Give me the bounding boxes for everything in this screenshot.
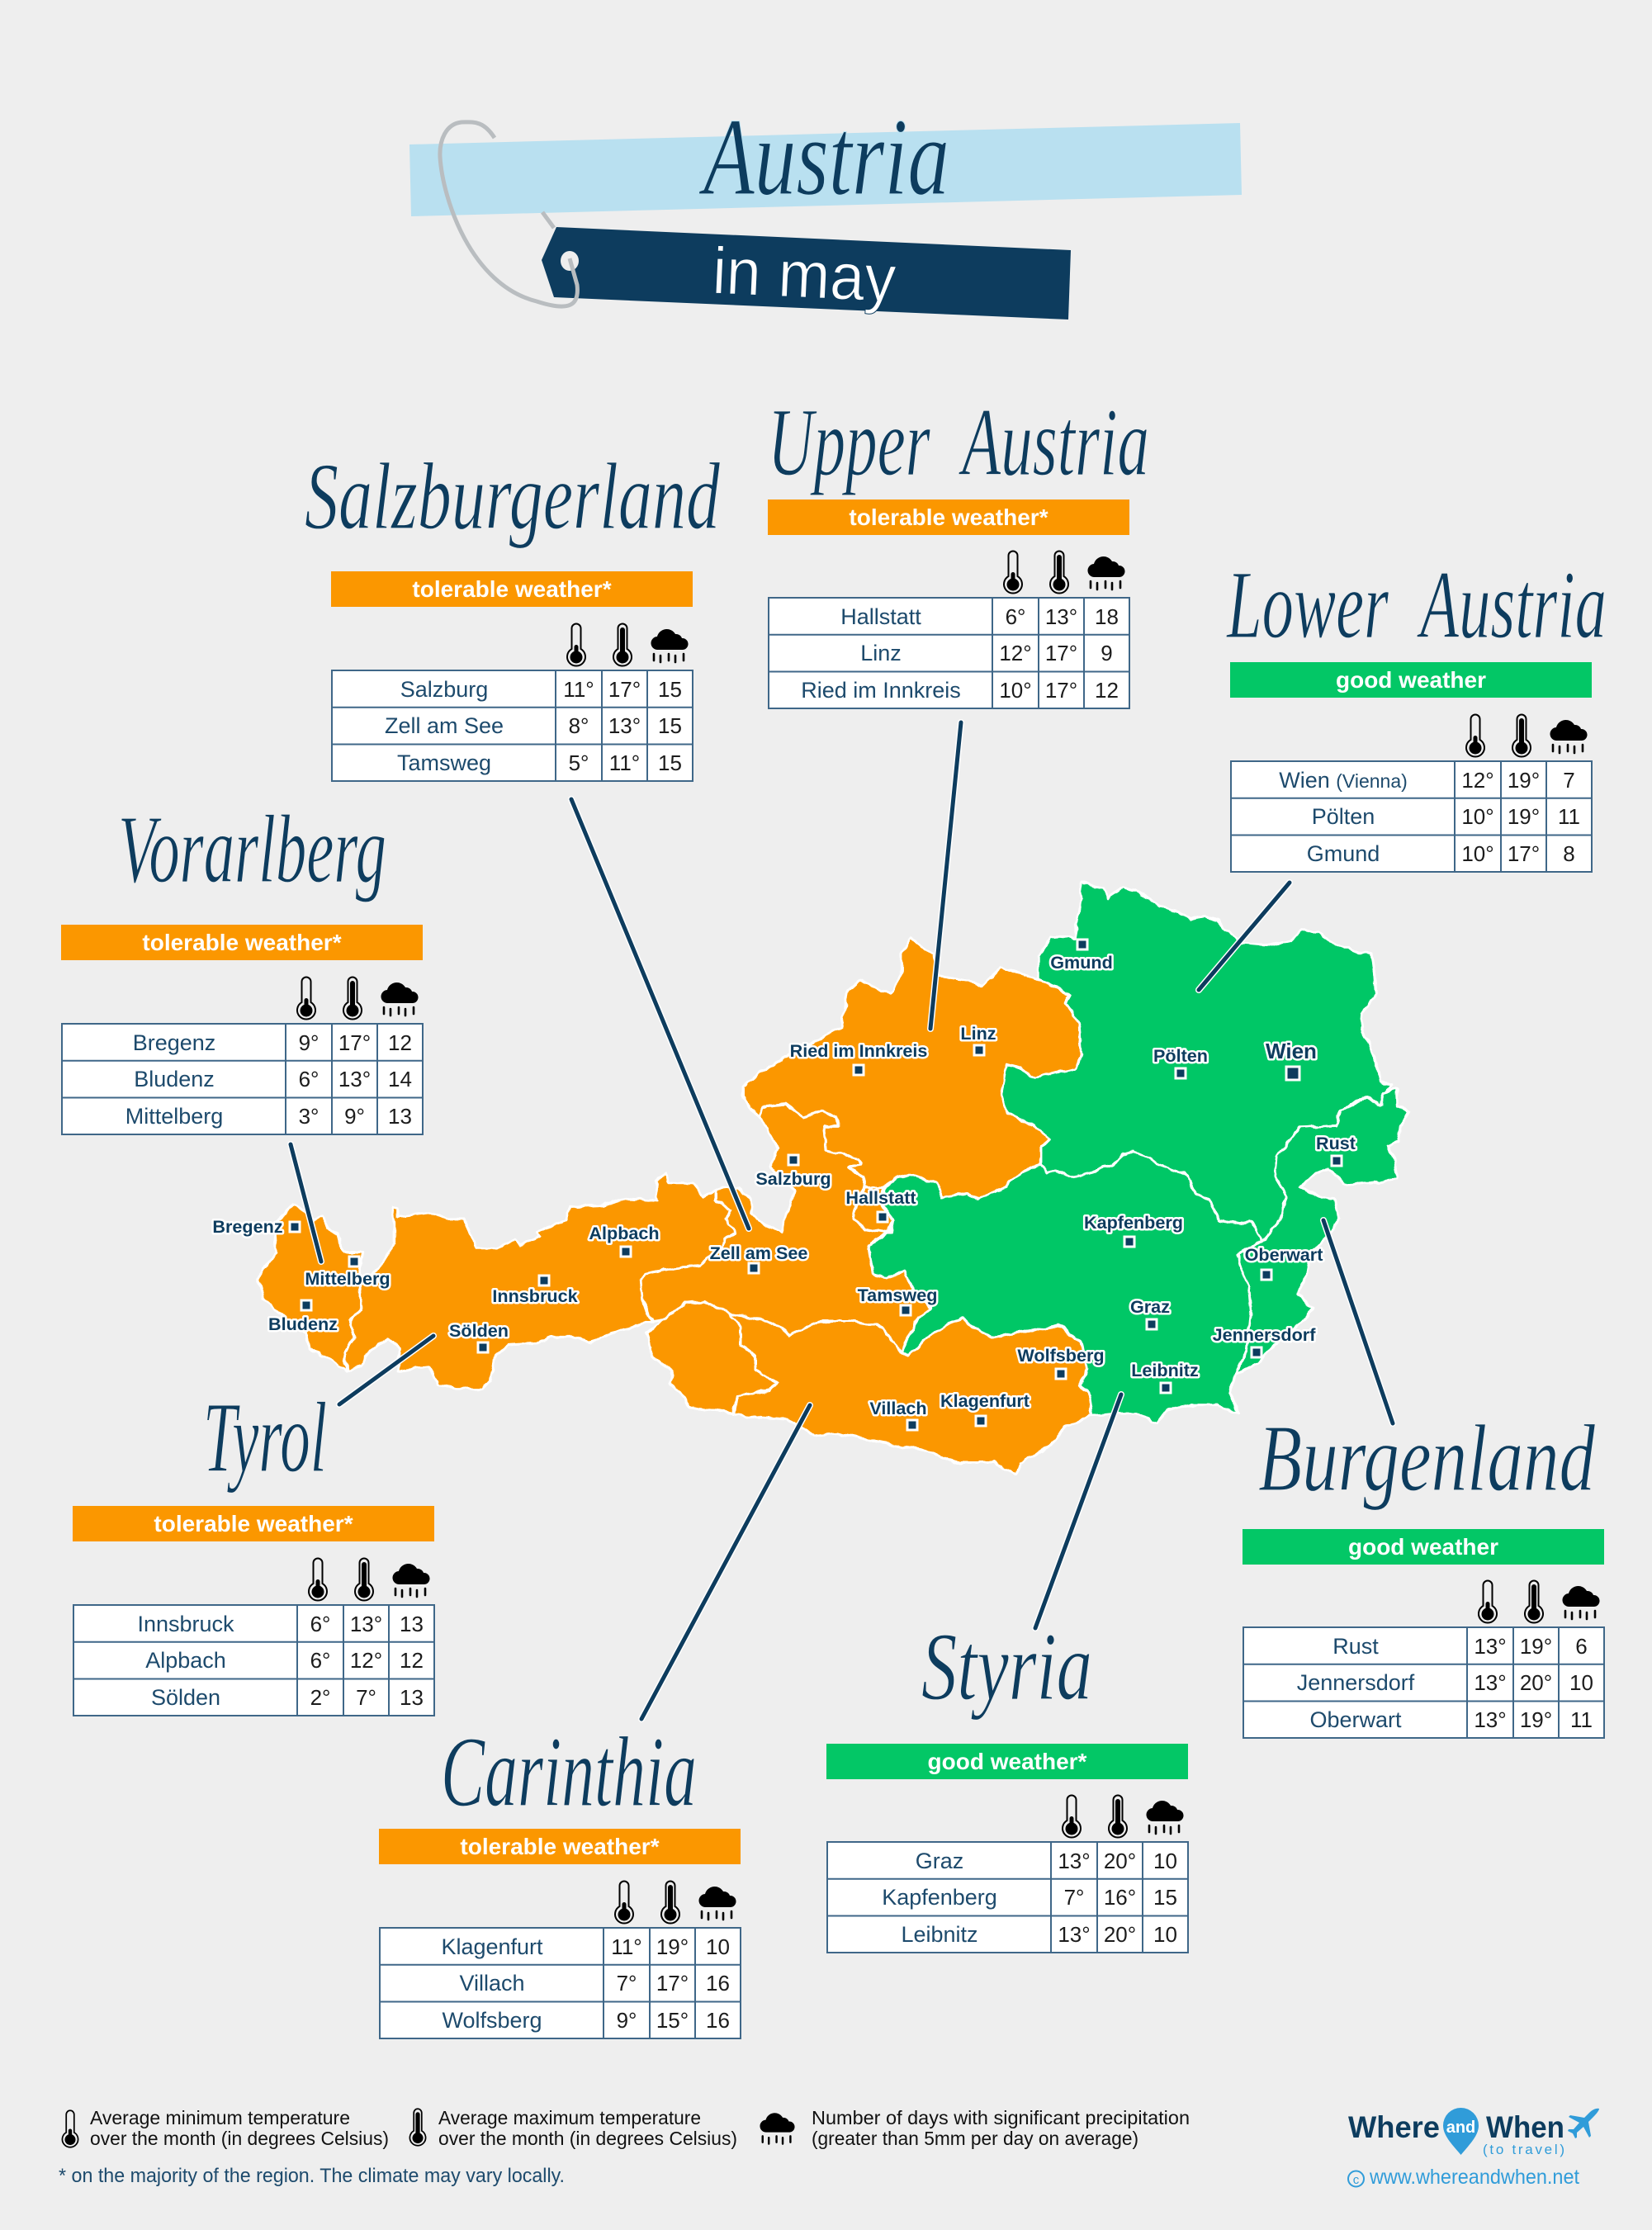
climate table: 17° — [1508, 841, 1540, 866]
climate table: 7° — [356, 1685, 376, 1710]
climate table: Kapfenberg — [882, 1885, 997, 1910]
subtitle: in may: in may — [711, 234, 897, 315]
city: Bludenz — [268, 1300, 338, 1334]
climate table: Salzburg — [400, 677, 488, 702]
region: Tyrol — [344, 1173, 736, 1389]
climate table: 10 — [706, 1934, 730, 1959]
climate table: Wien (Vienna) — [1279, 768, 1408, 793]
panel: Tyrol — [73, 1506, 434, 1716]
climate table: 11 — [1558, 804, 1580, 829]
climate table — [62, 1024, 423, 1134]
climate table: Zell am See — [385, 713, 504, 738]
status banner: good weather — [1348, 1534, 1498, 1560]
legend: precipitation: (greater than 5mm per day on average) — [812, 2128, 1138, 2149]
climate table — [73, 1605, 434, 1716]
climate table — [1243, 1627, 1604, 1738]
climate table: 13 — [400, 1612, 424, 1636]
status banner: tolerable weather* — [849, 504, 1048, 530]
panel: Lower Austria — [1230, 662, 1592, 872]
city: Leibnitz: Leibnitz — [1131, 1360, 1199, 1380]
city: Mittelberg: Mittelberg — [305, 1268, 391, 1289]
region: Burgenland — [1235, 1089, 1410, 1374]
climate table: 2° — [310, 1685, 330, 1710]
climate table: 7° — [1064, 1885, 1084, 1910]
region: Upper Austria — [743, 939, 1081, 1200]
climate table — [827, 1842, 1188, 1953]
panel: Vorarlberg — [61, 925, 423, 1134]
heading: Tyrol: Tyrol — [203, 1382, 327, 1494]
region: Vorarlberg — [258, 1205, 363, 1371]
line: Vorarlberg — [291, 1144, 321, 1262]
panel: Styria — [826, 1744, 1188, 1953]
climate table: Sölden — [151, 1685, 220, 1710]
legend: minimum temperature — [62, 2107, 389, 2149]
city: Kapfenberg — [1084, 1212, 1183, 1247]
climate table: Linz — [860, 641, 902, 665]
city: Kapfenberg: Kapfenberg — [1084, 1212, 1183, 1233]
status banner — [1243, 1529, 1604, 1565]
region: Hallstatt pocket — [854, 1187, 893, 1233]
climate table: Bregenz — [133, 1030, 215, 1055]
climate table: 16 — [706, 2008, 730, 2033]
climate table: 12 — [1095, 678, 1119, 703]
city: Wien: Wien — [1266, 1039, 1317, 1063]
city: Zell am See — [710, 1243, 807, 1273]
climate table: 17° — [1045, 678, 1077, 703]
city: Linz: Linz — [960, 1023, 996, 1044]
city: Graz — [1130, 1296, 1170, 1329]
city: Graz: Graz — [1130, 1296, 1170, 1317]
climate table: 18 — [1095, 604, 1119, 629]
climate table: 20° — [1520, 1670, 1552, 1695]
climate table: 15 — [658, 750, 682, 775]
status banner — [768, 500, 1129, 535]
climate table: Gmund — [1307, 841, 1380, 866]
climate table: Klagenfurt — [441, 1934, 543, 1959]
status banner: good weather* — [928, 1749, 1087, 1774]
city: Gmund — [1050, 940, 1113, 973]
climate table: 17° — [338, 1030, 371, 1055]
climate table: 5° — [569, 750, 589, 775]
climate table: 13° — [1474, 1707, 1507, 1732]
panel: Burgenland — [1243, 1529, 1604, 1738]
city: Alpbach — [589, 1223, 660, 1257]
climate table: Pölten — [1312, 804, 1375, 829]
city: Hallstatt: Hallstatt — [845, 1187, 916, 1208]
climate table: 12° — [350, 1648, 382, 1673]
climate table: Bludenz — [134, 1067, 215, 1091]
title band — [409, 123, 1242, 216]
logo: Where: Where — [1348, 2110, 1440, 2144]
climate table: 9° — [617, 2008, 637, 2033]
climate table: Graz — [916, 1849, 963, 1873]
weather icons — [1004, 552, 1125, 594]
luggage tag — [542, 227, 1071, 320]
weather icons — [615, 1881, 736, 1924]
climate table — [380, 1928, 741, 2038]
climate table: 20° — [1104, 1849, 1136, 1873]
city: Innsbruck — [492, 1276, 579, 1306]
city: Jennersdorf: Jennersdorf — [1213, 1324, 1316, 1345]
climate table: 19° — [1508, 768, 1540, 793]
region: Lower Austria — [1001, 881, 1392, 1241]
panel: Salzburgerland — [331, 571, 693, 781]
city: Tamsweg — [858, 1285, 937, 1315]
climate table: 17° — [608, 677, 641, 702]
city: Hallstatt — [845, 1187, 916, 1222]
climate table: 10° — [1461, 841, 1494, 866]
climate table: 19° — [1520, 1634, 1552, 1659]
weather icons — [1466, 715, 1588, 757]
city labels and markers — [212, 940, 1356, 1430]
line: Upper Austria — [930, 722, 961, 1029]
footnote: * on the majority of the region. The climate may vary locally. — [59, 2165, 565, 2187]
city: Innsbruck: Innsbruck — [492, 1285, 579, 1306]
heading: Styria: Styria — [921, 1612, 1092, 1721]
climate table: 14 — [388, 1067, 412, 1091]
climate table: 6° — [1006, 604, 1025, 629]
climate table: 12° — [999, 641, 1032, 665]
weather icons — [1479, 1580, 1600, 1623]
climate table: 19° — [1508, 804, 1540, 829]
logo: plane icon — [1568, 2109, 1599, 2138]
heading: Salzburgerland: Salzburgerland — [305, 444, 720, 549]
climate table: 15 — [658, 713, 682, 738]
status banner: tolerable weather* — [154, 1511, 353, 1536]
city: Salzburg: Salzburg — [755, 1168, 831, 1189]
status banner — [331, 571, 693, 607]
legend: maximum temperature: Average maximum temperature — [438, 2107, 701, 2128]
city: Zell am See: Zell am See — [710, 1243, 807, 1263]
city: Alpbach: Alpbach — [589, 1223, 660, 1243]
line: Lower Austria — [1199, 883, 1290, 990]
heading: Vorarlberg: Vorarlberg — [118, 795, 386, 903]
legend: precipitation: Number of days with significant precipitation — [812, 2107, 1190, 2128]
city: Linz — [960, 1023, 996, 1055]
title group — [409, 96, 1242, 320]
city: Klagenfurt — [940, 1390, 1030, 1426]
climate table: 10 — [1153, 1922, 1177, 1947]
climate table: 11° — [609, 750, 640, 775]
status banner: tolerable weather* — [412, 576, 612, 602]
climate table: 12° — [1461, 768, 1494, 793]
city: Bludenz: Bludenz — [268, 1314, 338, 1334]
climate table: 13° — [1474, 1634, 1507, 1659]
map of Austria — [258, 881, 1410, 1475]
climate table: 15 — [658, 677, 682, 702]
climate table: 6 — [1575, 1634, 1588, 1659]
panel: Upper Austria — [768, 500, 1129, 708]
panel: Carinthia — [379, 1829, 741, 2038]
climate table — [1231, 761, 1592, 872]
city: Oberwart — [1245, 1244, 1323, 1280]
city: Rust: Rust — [1316, 1133, 1356, 1153]
region: East Tyrol — [646, 1301, 776, 1414]
climate table: Villach — [459, 1971, 525, 1996]
climate table: 9° — [299, 1030, 319, 1055]
climate table: 10° — [1461, 804, 1494, 829]
heading: Carinthia: Carinthia — [441, 1716, 697, 1828]
legend: precipitation — [760, 2107, 1190, 2149]
city: Salzburg — [755, 1155, 831, 1189]
legend: minimum temperature: over the month (in degrees Celsius) — [90, 2128, 389, 2149]
city: Leibnitz — [1131, 1360, 1199, 1393]
tag hole — [561, 251, 579, 271]
logo: pin with and: and — [1446, 2119, 1475, 2137]
climate table: Innsbruck — [137, 1612, 234, 1636]
city: Sölden: Sölden — [449, 1320, 509, 1341]
line: Carinthia — [641, 1405, 810, 1719]
climate table: 16° — [1104, 1885, 1136, 1910]
climate table: Alpbach — [145, 1648, 226, 1673]
city: Klagenfurt: Klagenfurt — [940, 1390, 1030, 1411]
climate table: 13° — [1474, 1670, 1507, 1695]
logo: copyright icon — [1348, 2171, 1364, 2187]
legend — [59, 2107, 1190, 2187]
legend: minimum temperature: Average minimum temperature — [90, 2107, 350, 2128]
climate table: 13° — [1045, 604, 1077, 629]
climate table: 13° — [1058, 1849, 1091, 1873]
climate table: Leibnitz — [901, 1922, 978, 1947]
climate table: 19° — [656, 1934, 689, 1959]
city: Tamsweg: Tamsweg — [858, 1285, 937, 1305]
climate table: 9° — [344, 1104, 365, 1129]
city: Wolfsberg: Wolfsberg — [1017, 1345, 1105, 1366]
status banner — [1230, 662, 1592, 698]
logo: website: www.whereandwhen.net — [1369, 2166, 1579, 2189]
climate table: 8 — [1563, 841, 1575, 866]
climate table: 10 — [1569, 1670, 1593, 1695]
climate table: 6° — [310, 1648, 330, 1673]
climate table: 3° — [299, 1104, 319, 1129]
climate table: 11 — [1570, 1707, 1593, 1732]
climate table: Ried im Innkreis — [801, 678, 961, 703]
climate table: 9 — [1101, 641, 1113, 665]
line: Burgenland — [1323, 1220, 1393, 1423]
legend: maximum temperature — [409, 2107, 737, 2149]
status banner — [379, 1829, 741, 1864]
city: Wolfsberg — [1017, 1345, 1105, 1379]
climate table: 13 — [400, 1685, 424, 1710]
city: Ried im Innkreis: Ried im Innkreis — [790, 1040, 927, 1061]
logo: pin with and — [1443, 2108, 1479, 2155]
logo: When: When — [1486, 2110, 1564, 2144]
climate table: 20° — [1104, 1922, 1136, 1947]
status banner — [73, 1506, 434, 1541]
climate table: 10 — [1153, 1849, 1177, 1873]
city: Sölden — [449, 1320, 509, 1352]
climate table: 10° — [999, 678, 1032, 703]
climate table: 17° — [1045, 641, 1077, 665]
climate table: Rust — [1332, 1634, 1379, 1659]
line: Salzburgerland — [571, 799, 749, 1229]
climate table: 13° — [350, 1612, 382, 1636]
status banner: tolerable weather* — [460, 1834, 660, 1859]
climate table: 15° — [656, 2008, 689, 2033]
climate table — [769, 598, 1129, 708]
climate table: 13° — [608, 713, 641, 738]
climate table: 11° — [611, 1934, 642, 1959]
region: Styria — [869, 1151, 1262, 1423]
city: Mittelberg — [305, 1257, 391, 1289]
city: Pölten: Pölten — [1153, 1045, 1208, 1066]
climate table: Wolfsberg — [442, 2008, 542, 2033]
city: Bregenz: Bregenz — [212, 1216, 283, 1237]
status banner — [826, 1744, 1188, 1779]
city: Pölten — [1153, 1045, 1208, 1078]
climate table — [332, 670, 693, 781]
climate table: 7° — [617, 1971, 637, 1996]
logo — [1348, 2108, 1599, 2189]
city: Wien — [1266, 1039, 1317, 1080]
tag string — [440, 122, 577, 306]
weather icons — [567, 624, 689, 666]
heading: Upper Austria: Upper Austria — [768, 388, 1149, 496]
climate table: 12 — [388, 1030, 412, 1055]
climate table: 13° — [338, 1067, 371, 1091]
climate table: 19° — [1520, 1707, 1552, 1732]
climate table: Mittelberg — [125, 1104, 223, 1129]
climate table: 8° — [569, 713, 589, 738]
climate table: 6° — [299, 1067, 319, 1091]
weather icons — [309, 1559, 430, 1601]
climate table: 16 — [706, 1971, 730, 1996]
city: Ried im Innkreis — [790, 1040, 927, 1075]
logo: to travel: (to travel) — [1483, 2142, 1564, 2157]
climate table: 11° — [563, 677, 594, 702]
status banner — [61, 925, 423, 960]
weather icons — [297, 978, 419, 1020]
city: Rust — [1316, 1133, 1356, 1166]
weather icons — [1063, 1795, 1184, 1838]
climate table: 13 — [388, 1104, 412, 1129]
climate table: Oberwart — [1309, 1707, 1402, 1732]
climate table: Tamsweg — [397, 750, 491, 775]
climate table: 6° — [310, 1612, 330, 1636]
climate table: 15 — [1153, 1885, 1177, 1910]
climate table: 7 — [1563, 768, 1575, 793]
climate table: 13° — [1058, 1922, 1091, 1947]
region: Carinthia — [730, 1314, 1092, 1475]
title: Austria: Austria — [698, 96, 949, 218]
leader lines — [291, 722, 1393, 1719]
region: Salzburgerland — [641, 1105, 931, 1352]
line: Styria — [1035, 1394, 1121, 1628]
status banner: tolerable weather* — [142, 930, 342, 955]
climate table: Jennersdorf — [1297, 1670, 1415, 1695]
city: Jennersdorf — [1213, 1324, 1316, 1357]
city: Villach — [869, 1398, 927, 1430]
climate table: 17° — [656, 1971, 689, 1996]
legend: maximum temperature: over the month (in degrees Celsius) — [438, 2128, 737, 2149]
line: Tyrol — [339, 1336, 433, 1404]
logo: copyright icon: c — [1353, 2173, 1360, 2187]
climate table: 12 — [400, 1648, 424, 1673]
city: Villach: Villach — [869, 1398, 927, 1418]
city: Gmund: Gmund — [1050, 952, 1113, 973]
status banner: good weather — [1336, 667, 1486, 693]
city: Oberwart: Oberwart — [1245, 1244, 1323, 1265]
climate table: Hallstatt — [840, 604, 921, 629]
